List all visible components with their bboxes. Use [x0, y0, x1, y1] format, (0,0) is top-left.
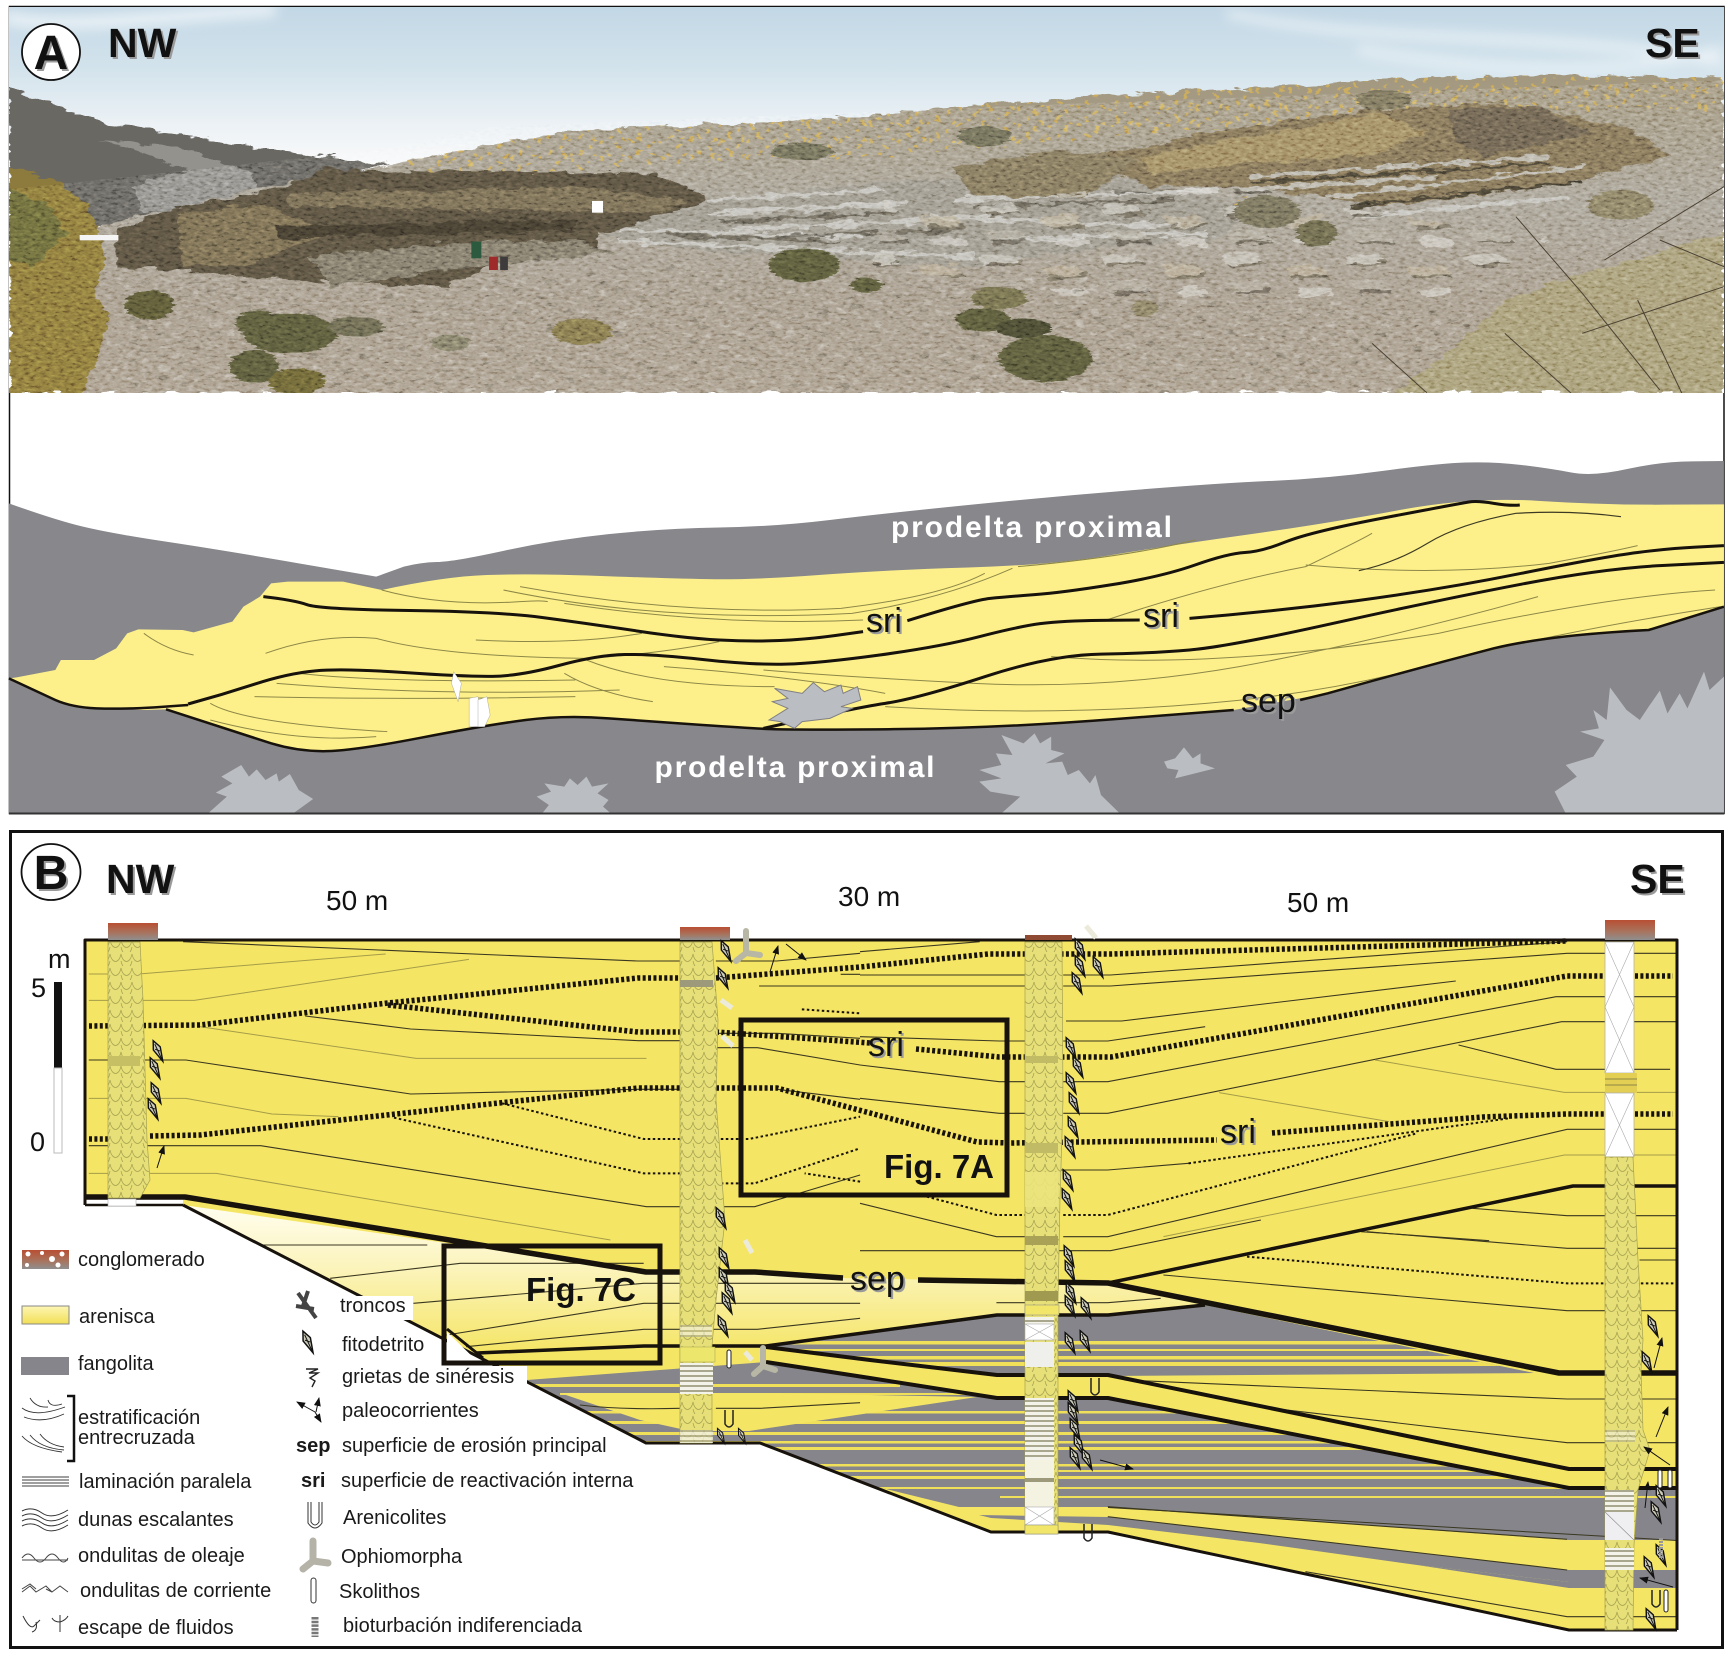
- legend: escape de fluidos: escape de fluidos: [78, 1617, 234, 1639]
- lower mudstone body: [527, 1362, 1677, 1540]
- photo grain texture: [9, 80, 1724, 393]
- legend: [21, 1249, 634, 1639]
- legend: sri: sri: [301, 1470, 325, 1492]
- central concretion: [769, 683, 861, 728]
- label circle A: [22, 24, 80, 80]
- internal thin cross-strata: [144, 533, 1721, 738]
- label circle A: A: [34, 27, 68, 80]
- bare shrub bottom right: [1394, 233, 1724, 393]
- legend: fitodetrito: [299, 1329, 424, 1356]
- legend: Skolithos: [311, 1578, 420, 1603]
- white patch below 7C corner: [447, 1332, 476, 1360]
- vertical scale bar: 0: [30, 1127, 45, 1157]
- panel B: correlation panel: [10, 832, 1722, 1648]
- main slope: [9, 75, 1724, 393]
- NW label section: NW: [106, 856, 175, 902]
- label sep: sep: [1241, 682, 1296, 720]
- figure 7A locator box: [741, 1020, 1007, 1195]
- label Fig 7C: Fig. 7C: [526, 1271, 636, 1308]
- legend: estratificación entrecruzada: entrecruzada: [78, 1427, 196, 1449]
- legend: conglomerado: [22, 1249, 205, 1271]
- legend: fangolita: fangolita: [78, 1353, 154, 1375]
- legend: paleocorrientes: paleocorrientes: [342, 1400, 479, 1422]
- sandstone body: [9, 500, 1724, 751]
- pale strata centre: [598, 173, 1250, 267]
- distance 30 m: 30 m: [838, 881, 900, 912]
- SE label section: SE: [1630, 856, 1685, 902]
- sedimentary log column 4: [1605, 920, 1655, 1630]
- thin stratal lines lower right: [860, 1220, 1676, 1617]
- upper mudstone body: [766, 1305, 1534, 1376]
- label sri 1: sri: [866, 602, 902, 640]
- rock rubble field: [874, 187, 1549, 300]
- white gap under base left: [85, 1199, 183, 1206]
- white scale marker: [592, 201, 603, 213]
- thin stratal lines lower left: [261, 1245, 860, 1409]
- upper interbedded sand stripes: [760, 1341, 1520, 1366]
- legend: conglomerado: conglomerado: [78, 1249, 205, 1271]
- legend: ondulitas de oleaje: ondulitas de oleaje: [78, 1545, 245, 1567]
- sri dotted surfaces: [89, 941, 1673, 1143]
- legend: sri: superficie de reactivación interna: [341, 1470, 634, 1492]
- figure 7C locator box: [444, 1246, 660, 1363]
- legend: grietas de sinéresis: grietas de sinéresis: [342, 1366, 514, 1388]
- legend: ondulitas de corriente: ondulitas de corriente: [80, 1580, 271, 1602]
- label circle B: [22, 844, 80, 900]
- thin stratal lines right section: [860, 942, 1676, 1241]
- legend: bioturbación indiferenciada: bioturbación indiferenciada: [343, 1615, 583, 1637]
- bare twigs bottom right: [1372, 187, 1724, 393]
- stratigraphic cross-section: [85, 920, 1700, 1631]
- text: prodelta proximal lower: prodelta proximal: [654, 751, 934, 784]
- clouds: [9, 7, 1724, 74]
- vertical scale bar: 5: [31, 973, 46, 1003]
- label sri 2: sri: [1143, 597, 1179, 635]
- hillside terrain in photograph: [9, 75, 1724, 393]
- desert shrubs: [125, 90, 1654, 395]
- concretions: [208, 672, 1724, 813]
- legend: fitodetrito: fitodetrito: [342, 1334, 424, 1356]
- legend: estratificación entrecruzada: [22, 1396, 200, 1461]
- sep and major bounding surfaces: [85, 940, 1677, 1630]
- sedimentary log column 2: [680, 927, 730, 1443]
- distance 50 m right: 50 m: [1287, 887, 1349, 918]
- shrubs and details layer: [125, 90, 1654, 395]
- label circle B: B: [34, 847, 68, 900]
- panel A frame: [10, 6, 1724, 814]
- text: prodelta proximal upper: prodelta proximal: [891, 511, 1172, 544]
- legend: sep: superficie de erosión principal: [342, 1435, 607, 1457]
- thin stratal lines left section: [89, 942, 860, 1240]
- sedimentary log column 3: [1025, 935, 1072, 1534]
- tan rock ledges right: [1084, 103, 1671, 207]
- legend: paleocorrientes: [297, 1398, 479, 1422]
- sedimentary log column 1: [108, 923, 158, 1206]
- label Fig 7A: Fig. 7A: [884, 1148, 994, 1185]
- prodelta mudstone background: [9, 461, 1724, 814]
- legend: Arenicolites: Arenicolites: [343, 1507, 446, 1529]
- sandstone wedge in lower mudstone: [560, 1393, 977, 1431]
- legend: arenisca: arenisca: [79, 1306, 155, 1328]
- NW label photo: NW: [108, 20, 177, 66]
- panel A lower thick border: [9, 812, 1724, 814]
- white road fragment: [80, 235, 118, 240]
- legend: dunas escalantes: dunas escalantes: [78, 1509, 234, 1531]
- geological interpretation drawing: [9, 461, 1724, 814]
- legend: Ophiomorpha: Ophiomorpha: [341, 1546, 463, 1568]
- legend: sep: sep: [296, 1435, 330, 1457]
- white backing troncos: [333, 1296, 413, 1320]
- dry grass tufts: [398, 75, 1724, 180]
- panel B frame: [10, 832, 1722, 1648]
- label sri right: sri: [1220, 1113, 1256, 1151]
- legend: Ophiomorpha: [303, 1541, 463, 1569]
- yellow autumn tree left: [9, 167, 111, 393]
- base line inside 7C corner: [447, 1329, 483, 1358]
- SE label photo: SE: [1645, 20, 1700, 66]
- legend: Arenicolites: [308, 1502, 446, 1529]
- lower sandstone and mudstone bands: [979, 1515, 1677, 1582]
- legend: fangolita: [21, 1353, 154, 1375]
- vertical scale bar: m: [48, 944, 70, 974]
- legend: troncos: [296, 1291, 406, 1318]
- panel A: field photograph and interpretation: [9, 6, 1724, 814]
- legend: escape de fluidos: [23, 1615, 234, 1639]
- sep and sri surfaces: [9, 502, 1724, 751]
- plant debris symbols: [145, 937, 1669, 1631]
- sandstone fill: [85, 940, 1677, 1630]
- legend: Skolithos: Skolithos: [339, 1581, 420, 1603]
- legend: troncos: troncos: [340, 1295, 406, 1317]
- distant left hill: [9, 87, 387, 233]
- lower interbedded sand stripes: [500, 1384, 1700, 1498]
- distance 50 m left: 50 m: [326, 885, 388, 916]
- paleocurrent arrows: [157, 944, 1673, 1587]
- trace fossils in section: [721, 926, 1672, 1612]
- sky: [9, 7, 1724, 393]
- legend: estratificación entrecruzada: estratificación: [78, 1407, 200, 1429]
- legend: arenisca: [22, 1306, 155, 1328]
- legend: laminación paralela: laminación paralela: [79, 1471, 252, 1493]
- group of geologists: [471, 242, 508, 270]
- panoramic outcrop photograph: [9, 7, 1724, 395]
- pale sandstone wedge: [183, 1205, 1205, 1353]
- dark outcrop left: [116, 170, 708, 287]
- label sep: sep: [850, 1260, 905, 1298]
- human figures silhouettes: [451, 672, 490, 727]
- label sri left: sri: [868, 1026, 904, 1064]
- white backing grietas: [333, 1366, 527, 1387]
- markers and twigs: [80, 187, 1724, 393]
- vertical scale bar: [30, 944, 70, 1157]
